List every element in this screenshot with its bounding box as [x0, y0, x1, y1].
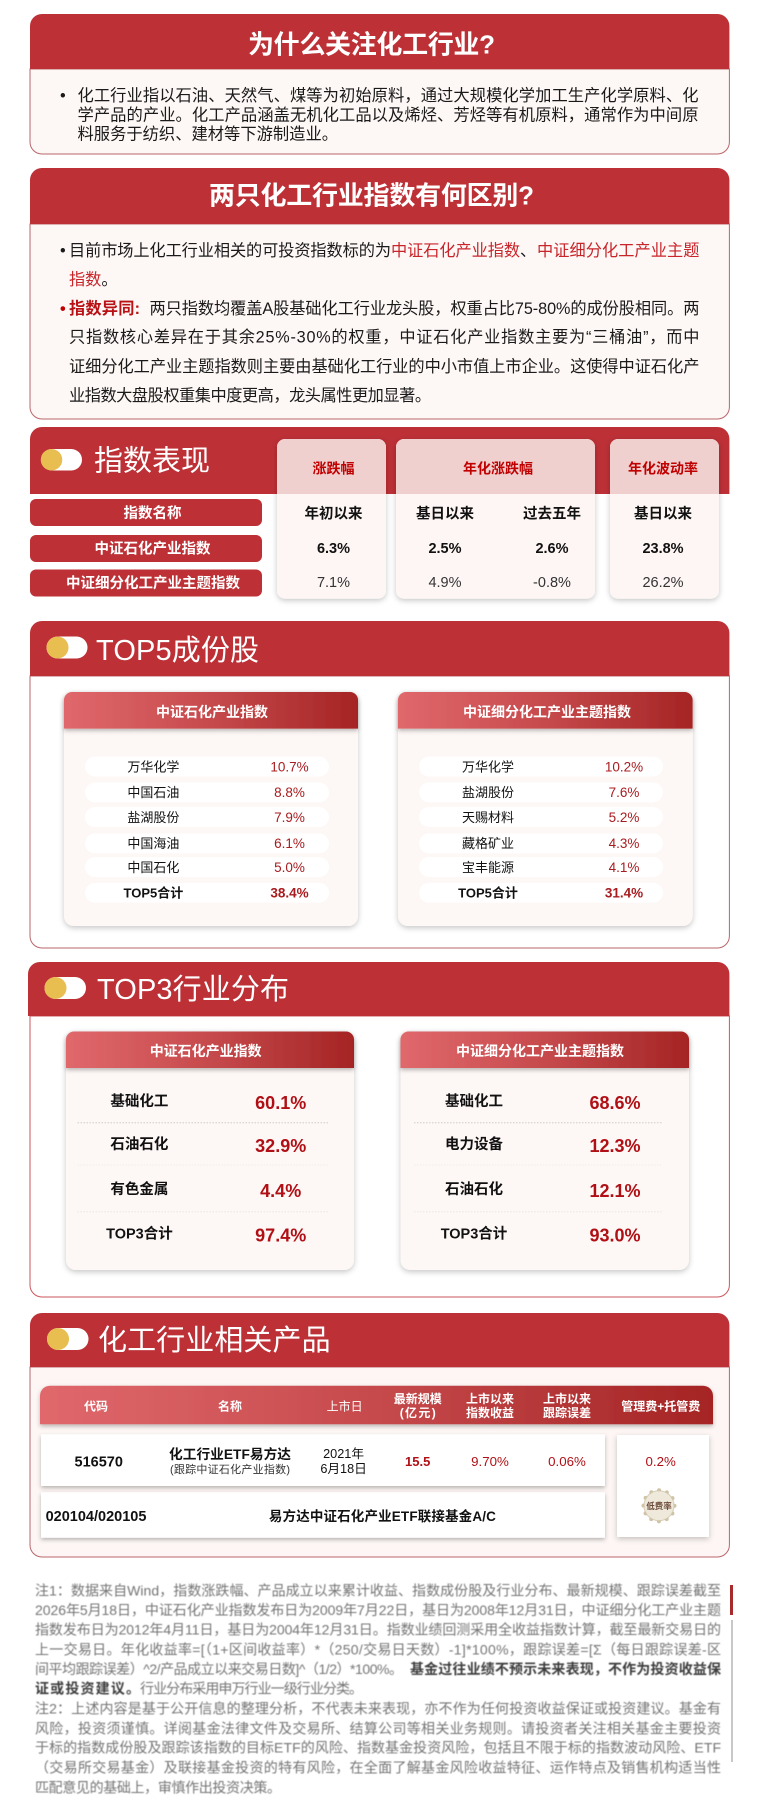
note 2: 于标的指数成份股及跟踪该指数的目标ETF的风险、指数基金投资风险，包括且不限于标的指数波动风险、ETF: [35, 1740, 721, 1756]
panel: difference between the two indexes: [30, 168, 729, 419]
card: CSI petrochemical top 5: [64, 692, 358, 926]
heading: index performance: 指数表现: [94, 444, 210, 477]
column: change: 6.3%: [317, 541, 350, 557]
card: CSI segmented chemical top 3: 68.6%: [589, 1093, 641, 1113]
text block: industry definition: 学产品的产业。化工产品涵盖无机化工品以及烯烃、芳烃等有机原料，通常作为中间原: [78, 106, 698, 124]
card: CSI segmented chemical top 3: 93.0%: [589, 1226, 641, 1246]
card: CSI segmented chemical top 3: 基础化工: [445, 1092, 503, 1110]
note 2: 风险，投资须谨慎。详阅基金法律文件及交易所、结算公司等相关业务规则。请投资者关注相关基金主要投资: [35, 1720, 721, 1736]
text block: investable indexes: 目前市场上化工行业相关的可投资指数标的为: [69, 242, 391, 260]
text block: investable indexes: 指数: [69, 271, 101, 289]
card: CSI petrochemical top 5: 7.9%: [274, 810, 305, 825]
table header: 跟踪误差: [543, 1405, 591, 1420]
note 1: 2026年5月18日，中证石化产业指数发布日为2009年7月22日，基日为2008年12月31日，中证细分化工产业主题: [35, 1602, 721, 1618]
icon: toggle pill: [41, 449, 82, 470]
card: CSI segmented chemical top 5: 宝丰能源: [462, 860, 514, 875]
table row: feeder fund: 020104/020105: [46, 1509, 146, 1525]
heading: related products: 化工行业相关产品: [98, 1324, 331, 1357]
note 2: 注2：上述内容是基于公开信息的整理分析，不代表未来表现，亦不作为任何投资收益保证或投资建议。基金有: [35, 1700, 721, 1716]
note 1: 上一交易日。年化收益率=[（1+区间收益率）*（250/交易日天数）-1]*100%，跟踪误差=[Σ（每日跟踪误差-区: [35, 1641, 721, 1657]
text block: investable indexes: •: [60, 242, 66, 260]
column: annualized change: 基日以来: [416, 505, 474, 523]
text block: similarities and differences: •: [60, 300, 66, 318]
table column: fees: [617, 1435, 709, 1537]
text block: similarities and differences: [60, 300, 699, 405]
panel: TOP5 constituents: [30, 621, 729, 948]
row labels: 中证石化产业指数: [94, 540, 211, 558]
card: CSI segmented chemical top 5: 万华化学: [462, 759, 514, 774]
icon: low-fee badge: 低费率: [646, 1501, 672, 1511]
card: CSI petrochemical top 5: 10.7%: [270, 759, 309, 774]
card: CSI petrochemical top 5: TOP5合计: [124, 886, 183, 901]
heading: TOP3 industry distribution: TOP3行业分布: [97, 973, 289, 1006]
column: annualized volatility: 基日以来: [634, 505, 692, 523]
icon: toggle pill: [47, 1328, 88, 1350]
table row: ETF: 2021年: [323, 1447, 364, 1461]
table row: ETF: 6月18日: [320, 1462, 367, 1476]
table row: feeder fund: [41, 1492, 605, 1538]
footnotes: [35, 1583, 721, 1795]
card: CSI petrochemical top 5: 万华化学: [127, 759, 179, 774]
table header: 最新规模: [394, 1391, 442, 1406]
card: CSI segmented chemical top 3: 电力设备: [445, 1135, 503, 1153]
column: annualized change: [396, 439, 595, 599]
panel: index performance: [30, 427, 729, 599]
table row: ETF: 9.70%: [471, 1454, 509, 1469]
card: CSI petrochemical top 5: 6.1%: [274, 836, 305, 851]
card: CSI petrochemical top 5: 中证石化产业指数: [156, 704, 268, 720]
panel: TOP3 industry distribution: [28, 962, 729, 1297]
card: CSI petrochemical top 5: 8.8%: [274, 785, 305, 800]
card: CSI petrochemical top 5: 中国石油: [127, 785, 179, 800]
text block: industry definition: •: [60, 87, 66, 105]
card: CSI segmented chemical top 5: 10.2%: [605, 759, 643, 774]
text block: investable indexes: [60, 242, 699, 289]
text block: similarities and differences: 两只指数均覆盖A股基础化工行业龙头股，权重占比75-80%的成份股相同。两: [150, 300, 699, 318]
text block: similarities and differences: 业指数大盘股权重集中度更高，龙头属性更加显著。: [69, 386, 431, 405]
table header: (亿元): [400, 1405, 436, 1420]
card: CSI segmented chemical top 5: TOP5合计: [458, 886, 518, 901]
column: change: 年初以来: [304, 505, 363, 523]
text block: similarities and differences: 只指数核心差异在于其余25%-30%的权重，中证石化产业指数主要为“三桶油”，而中: [69, 328, 699, 346]
note 1: 注1：数据来自Wind，指数涨跌幅、产品成立以来累计收益、指数成份股及行业分布、最新规模、跟踪误差截至: [35, 1583, 721, 1599]
text block: similarities and differences: 指数异同:: [69, 300, 140, 318]
card: CSI segmented chemical top 3: 石油石化: [445, 1180, 503, 1198]
card: CSI segmented chemical top 5: 天赐材料: [462, 810, 514, 825]
card: CSI petrochemical top 3: 60.1%: [255, 1093, 306, 1113]
card: CSI segmented chemical top 5: 4.1%: [609, 860, 639, 875]
table header: 代码: [84, 1399, 108, 1413]
decorative edge: [730, 1585, 733, 1762]
table header: 指数收益: [466, 1405, 514, 1420]
table row: ETF: [41, 1434, 605, 1486]
text block: industry definition: [60, 87, 698, 144]
table header: 上市日: [327, 1398, 363, 1413]
heading: TOP5 constituents: TOP5成份股: [96, 634, 259, 667]
row labels: [30, 499, 262, 596]
card: CSI segmented chemical top 5: 5.2%: [609, 810, 639, 825]
card: CSI petrochemical top 3: 中证石化产业指数: [150, 1043, 262, 1059]
table column: fees: 0.2%: [646, 1454, 676, 1469]
column: annualized volatility: 26.2%: [642, 575, 684, 591]
card: CSI segmented chemical top 5: 中证细分化工产业主题指数: [463, 704, 631, 720]
card: CSI petrochemical top 3: [66, 1032, 354, 1270]
note 1: 基金过往业绩不预示未来表现，不作为投资收益保: [410, 1661, 721, 1677]
text block: investable indexes: 、: [520, 242, 536, 260]
column: annualized volatility: 年化波动率: [628, 461, 698, 477]
card: CSI petrochemical top 3: 4.4%: [260, 1181, 301, 1201]
panel: why focus on the chemical industry: [30, 14, 729, 154]
icon: toggle pill: [46, 636, 88, 658]
text block: investable indexes: 。: [101, 271, 118, 289]
card: CSI segmented chemical top 5: 31.4%: [605, 886, 643, 901]
table header: [40, 1386, 713, 1424]
row labels: 中证细分化工产业主题指数: [66, 574, 240, 592]
card: CSI segmented chemical top 5: 7.6%: [609, 785, 639, 800]
column: change: [277, 439, 386, 599]
card: CSI segmented chemical top 3: 12.3%: [589, 1136, 641, 1156]
card: CSI segmented chemical top 5: 盐湖股份: [462, 785, 514, 800]
note 1: [35, 1583, 721, 1696]
card: CSI petrochemical top 3: 32.9%: [255, 1136, 306, 1156]
text block: investable indexes: 中证石化产业指数: [391, 242, 520, 260]
table row: ETF: (跟踪中证石化产业指数): [170, 1462, 290, 1476]
card: CSI segmented chemical top 5: 4.3%: [609, 836, 639, 851]
heading: index difference: 两只化工行业指数有何区别?: [209, 180, 534, 210]
card: CSI petrochemical top 3: TOP3合计: [106, 1224, 173, 1242]
column: annualized volatility: [610, 439, 719, 599]
card: CSI segmented chemical top 5: [398, 692, 693, 926]
card: CSI petrochemical top 3: 有色金属: [110, 1180, 168, 1198]
card: CSI petrochemical top 5: 5.0%: [274, 860, 305, 875]
card: CSI petrochemical top 5: 盐湖股份: [127, 810, 179, 825]
text block: similarities and differences: 证细分化工产业主题指数则主要由基础化工行业的中小市值上市企业。这使得中证石化产: [69, 358, 699, 376]
column: annualized change: 4.9%: [428, 575, 462, 591]
table row: feeder fund: 易方达中证石化产业ETF联接基金A/C: [269, 1508, 496, 1524]
card: CSI petrochemical top 3: 97.4%: [255, 1226, 306, 1246]
card: CSI petrochemical top 5: 38.4%: [270, 886, 309, 901]
card: CSI petrochemical top 3: 石油石化: [110, 1135, 169, 1153]
note 1: 证或投资建议。: [35, 1680, 140, 1696]
card: CSI segmented chemical top 3: 12.1%: [589, 1181, 641, 1201]
card: CSI petrochemical top 5: 中国海油: [127, 836, 179, 851]
table header: 管理费+托管费: [621, 1398, 700, 1413]
heading: why focus: 为什么关注化工行业?: [248, 29, 495, 59]
table row: ETF: 0.06%: [548, 1454, 586, 1469]
table header: 上市以来: [466, 1391, 514, 1406]
table row: ETF: 516570: [75, 1454, 123, 1470]
card: CSI segmented chemical top 5: 藏格矿业: [462, 836, 514, 851]
column: change: 7.1%: [317, 575, 350, 591]
panel: related chemical products: [30, 1313, 729, 1557]
table header: 上市以来: [543, 1391, 591, 1406]
icon: toggle pill: [44, 977, 86, 999]
text block: investable indexes: 中证细分化工产业主题: [537, 242, 699, 260]
note 2: [35, 1700, 721, 1795]
note 2: 匹配意见的基础上，审慎作出投资决策。: [35, 1779, 281, 1795]
note 1: 间平均跟踪误差）^2/产品成立以来交易日数]^（1/2）*100%。: [35, 1661, 403, 1677]
table row: ETF: 15.5: [405, 1454, 430, 1469]
card: CSI petrochemical top 3: 基础化工: [110, 1092, 168, 1110]
note 1: 行业分布采用申万行业一级行业分类。: [140, 1680, 363, 1696]
card: CSI segmented chemical top 3: TOP3合计: [441, 1224, 508, 1242]
column: annualized change: -0.8%: [533, 575, 571, 591]
card: CSI petrochemical top 5: 中国石化: [127, 860, 179, 875]
table header: 名称: [218, 1398, 242, 1413]
column: change: 涨跌幅: [312, 461, 354, 477]
column: annualized volatility: 23.8%: [642, 541, 684, 557]
table row: ETF: 化工行业ETF易方达: [169, 1446, 291, 1462]
column: annualized change: 2.6%: [535, 541, 569, 557]
card: CSI segmented chemical top 3: 中证细分化工产业主题指数: [456, 1043, 624, 1059]
text block: industry definition: 化工行业指以石油、天然气、煤等为初始原料，通过大规模化学加工生产化学原料、化: [78, 87, 698, 105]
note 1: 指数发布日为2012年4月11日，基日为2004年12月31日。指数业绩回测采用全收益指数计算，截至最新交易日的: [35, 1621, 721, 1637]
text block: industry definition: 料服务于纺织、建材等下游制造业。: [78, 126, 338, 144]
note 2: （交易所交易基金）及联接基金投资的特有风险，在全面了解基金风险收益特征、运作特点及销售机构适当性: [35, 1759, 721, 1775]
column: annualized change: 2.5%: [428, 541, 462, 557]
column: annualized change: 年化涨跌幅: [463, 461, 533, 477]
card: CSI segmented chemical top 3: [400, 1032, 689, 1270]
row labels: 指数名称: [124, 504, 182, 522]
column: annualized change: 过去五年: [523, 505, 581, 523]
